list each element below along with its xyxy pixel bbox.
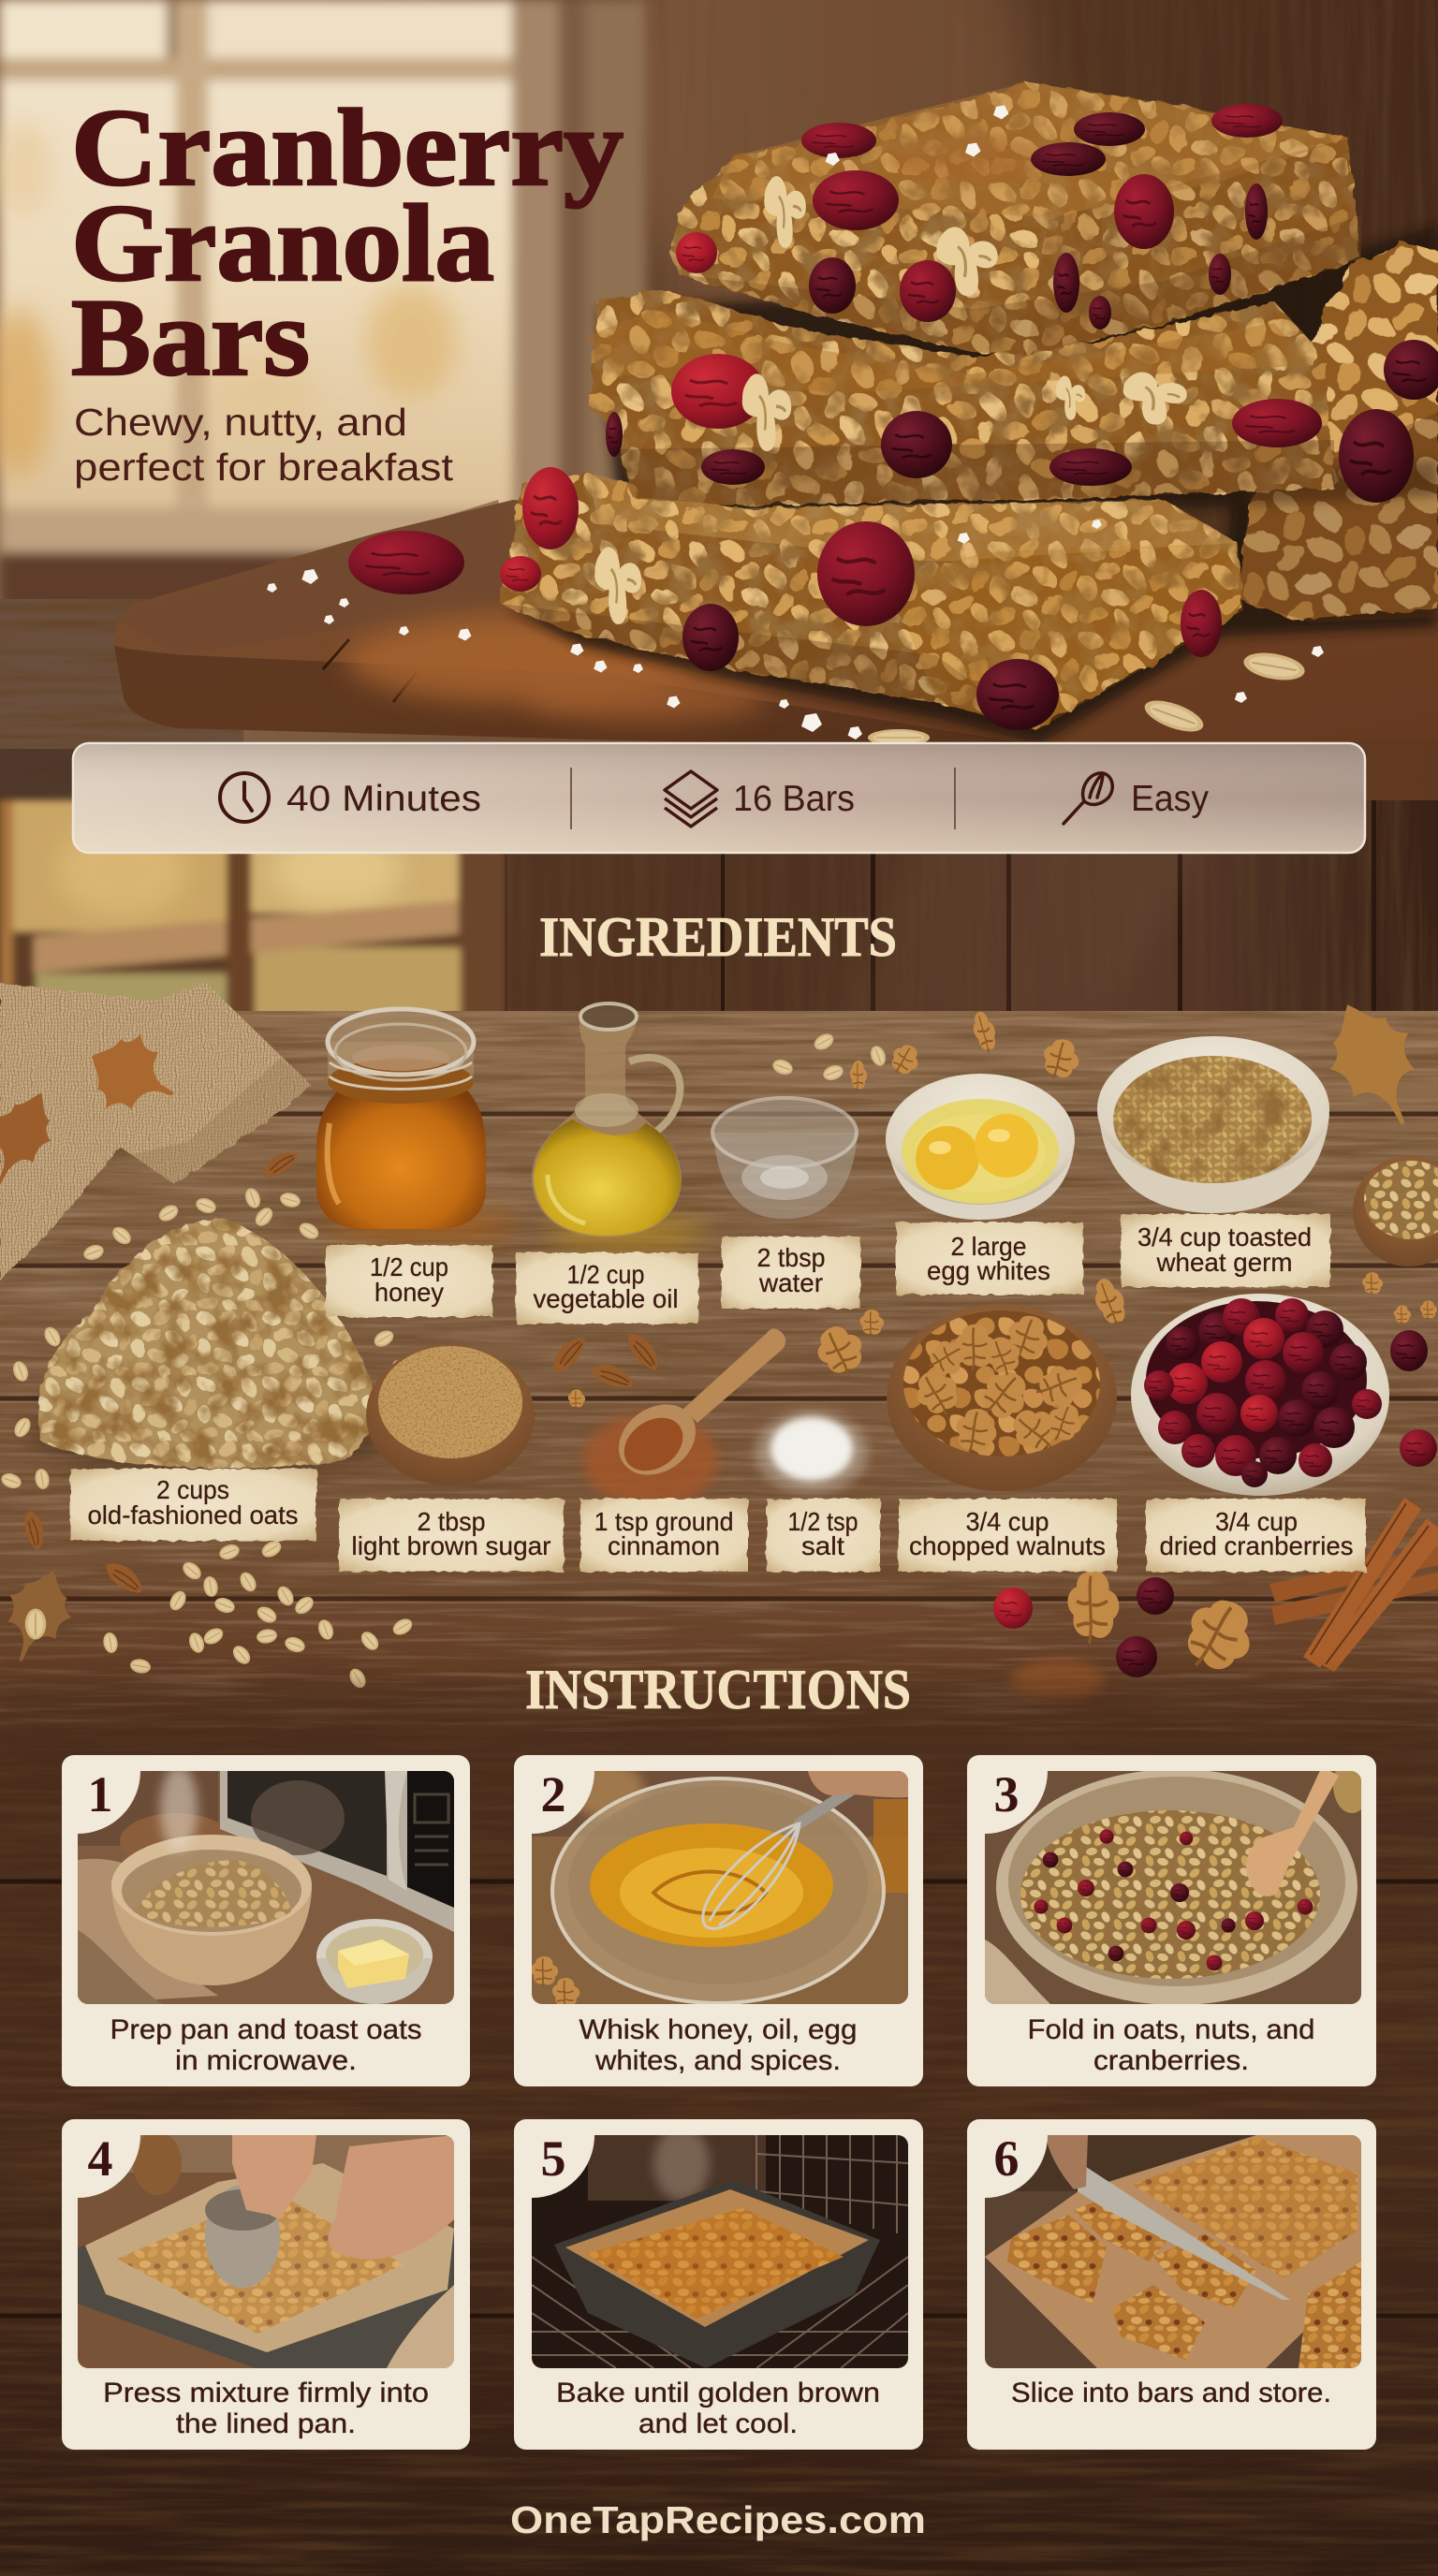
step 2 text: Whisk honey, oil, egg (579, 2014, 858, 2045)
label: brown sugar (339, 1499, 564, 1572)
stat: time: 40 Minutes (286, 779, 481, 819)
icon: layers (665, 771, 717, 827)
label: cranberries: dried cranberries (1159, 1531, 1354, 1560)
info bar (73, 743, 1365, 853)
label: salt: salt (801, 1531, 844, 1560)
step 2 text: whites, and spices. (594, 2045, 841, 2076)
honey jar (316, 1009, 515, 1247)
hero subtitle: perfect for breakfast (74, 446, 454, 489)
back granola bars (1238, 242, 1438, 622)
label: honey: honey (374, 1278, 444, 1307)
ingredient labels (70, 1214, 1366, 1572)
step 2 photo (531, 1762, 908, 2009)
panel: ingredients backdrop wall and window (0, 800, 1438, 1025)
label: walnuts: 3/4 cup (966, 1507, 1049, 1536)
step 4 text: Press mixture firmly into (103, 2378, 429, 2408)
hero title: Bars (71, 276, 310, 399)
label: oats: 2 cups (156, 1475, 229, 1504)
label: honey: 1/2 cup (370, 1252, 448, 1281)
step 6 badge (985, 2130, 1048, 2198)
label: walnuts: chopped walnuts (909, 1531, 1106, 1560)
salt pile (756, 1412, 868, 1494)
label: water: 2 tbsp (756, 1243, 826, 1272)
cutting board (114, 500, 1438, 800)
icon: clock (220, 773, 269, 822)
hero subtitle: Chewy, nutty, and (74, 401, 407, 444)
small oats bowl (1353, 1156, 1438, 1266)
step 3 badge: 3 (994, 1766, 1019, 1822)
label: cinnamon: cinnamon (608, 1531, 720, 1560)
icon: autumn leaves on burlap (0, 1018, 190, 1197)
hero subtitle (74, 401, 454, 489)
panel: ingredients table (0, 983, 1438, 1741)
step 1 text (110, 2014, 421, 2076)
burlap cloth (0, 983, 312, 1281)
step 3 photo (985, 1757, 1371, 2005)
step 2 text (579, 2014, 858, 2076)
step 6 photo (985, 2135, 1361, 2368)
step 5 badge (532, 2130, 594, 2198)
label: oats (70, 1469, 316, 1541)
step 3 text: Fold in oats, nuts, and (1028, 2014, 1314, 2045)
step 3 badge (985, 1766, 1048, 1834)
almonds (22, 1147, 664, 1599)
label: egg whites: 2 large (951, 1232, 1026, 1261)
step card 4 (62, 2119, 470, 2450)
oats pile (0, 1186, 413, 1491)
step 5 text: and let cool. (638, 2408, 798, 2439)
step 4 badge: 4 (88, 2130, 112, 2187)
label: vegetable oil: vegetable oil (534, 1284, 678, 1313)
label: vegetable oil: 1/2 cup (567, 1260, 644, 1289)
table under window (0, 599, 243, 800)
scattered cranberries and walnuts (568, 1009, 1437, 1684)
label: honey (326, 1245, 492, 1317)
middle granola bar (585, 290, 1334, 505)
footer website: OneTapRecipes.com (510, 2498, 926, 2541)
step 5 text (556, 2378, 880, 2439)
label: salt (767, 1499, 880, 1572)
step 4 badge (78, 2130, 140, 2198)
step 4 photo (78, 2131, 454, 2368)
label: salt: 1/2 tsp (788, 1507, 858, 1536)
step 1 photo (78, 1765, 454, 2004)
walnuts bowl (887, 1304, 1117, 1491)
wheat germ bowl (1097, 1036, 1329, 1213)
label: water (722, 1237, 860, 1309)
step card 6 (967, 2119, 1376, 2450)
window in ingredients section (0, 800, 507, 1020)
loose cranberry on board (348, 531, 464, 594)
label: cinnamon: 1 tsp ground (594, 1507, 734, 1536)
label: vegetable oil (516, 1252, 698, 1324)
panel: hero photo (0, 0, 1438, 800)
bottom granola bar (500, 467, 1243, 730)
icon: maple leaf right (1308, 987, 1438, 1142)
panel: instructions backdrop (0, 1685, 1438, 2576)
step card 2 (514, 1755, 923, 2086)
label: egg whites (896, 1222, 1083, 1295)
step card 3 (967, 1755, 1376, 2086)
hero title (71, 86, 624, 399)
label: water: water (758, 1268, 823, 1297)
oil bottle (532, 1003, 707, 1252)
hero title: Granola (71, 182, 494, 304)
step 1 badge (78, 1766, 140, 1834)
label: cranberries: 3/4 cup (1215, 1507, 1298, 1536)
step 1 text: Prep pan and toast oats (110, 2014, 421, 2045)
hero title: Cranberry (71, 86, 624, 209)
step 1 text: in microwave. (175, 2045, 357, 2076)
window in hero (0, 0, 646, 608)
label: cranberries (1146, 1499, 1366, 1572)
label: walnuts (899, 1499, 1117, 1572)
step card 5 (514, 2119, 923, 2450)
icon: whisk (1064, 773, 1112, 824)
wooden spoon with cinnamon (583, 1328, 785, 1507)
label: wheat germ: 3/4 cup toasted (1137, 1222, 1312, 1251)
step 1 badge: 1 (88, 1766, 112, 1822)
step 2 badge: 2 (541, 1766, 565, 1822)
scattered oats and leaf bits bottom left (0, 1538, 415, 1690)
heading: ingredients: INGREDIENTS (539, 906, 897, 968)
step card 1 (62, 1755, 470, 2086)
label: egg whites: egg whites (927, 1256, 1050, 1285)
stat: yield: 16 Bars (733, 779, 855, 819)
top granola bar (669, 82, 1361, 355)
label: wheat germ (1121, 1214, 1330, 1287)
step 2 badge (532, 1766, 594, 1834)
dried cranberries bowl (1131, 1294, 1389, 1496)
step 3 text (1028, 2014, 1314, 2076)
egg whites bowl (886, 1074, 1075, 1220)
brown sugar bowl (366, 1345, 535, 1486)
shadows between the bars (506, 225, 1438, 744)
step 4 text (103, 2378, 429, 2439)
step 3 text: cranberries. (1093, 2045, 1249, 2076)
water glass (712, 1098, 858, 1219)
label: cinnamon (580, 1499, 748, 1572)
cinnamon sticks (1269, 1498, 1438, 1672)
salt flakes and loose oats (267, 105, 1324, 746)
step 5 text: Bake until golden brown (556, 2378, 880, 2408)
step 6 text: Slice into bars and store. (1011, 2378, 1331, 2408)
heading: instructions: INSTRUCTIONS (525, 1659, 911, 1720)
stat: difficulty: Easy (1131, 779, 1209, 819)
step 5 badge: 5 (541, 2130, 565, 2187)
step 5 photo (532, 2126, 908, 2368)
label: brown sugar: light brown sugar (352, 1531, 550, 1560)
step 4 text: the lined pan. (176, 2408, 356, 2439)
label: wheat germ: wheat germ (1156, 1248, 1292, 1277)
step 6 badge: 6 (994, 2130, 1019, 2187)
label: brown sugar: 2 tbsp (418, 1507, 485, 1536)
label: oats: old-fashioned oats (88, 1500, 298, 1530)
